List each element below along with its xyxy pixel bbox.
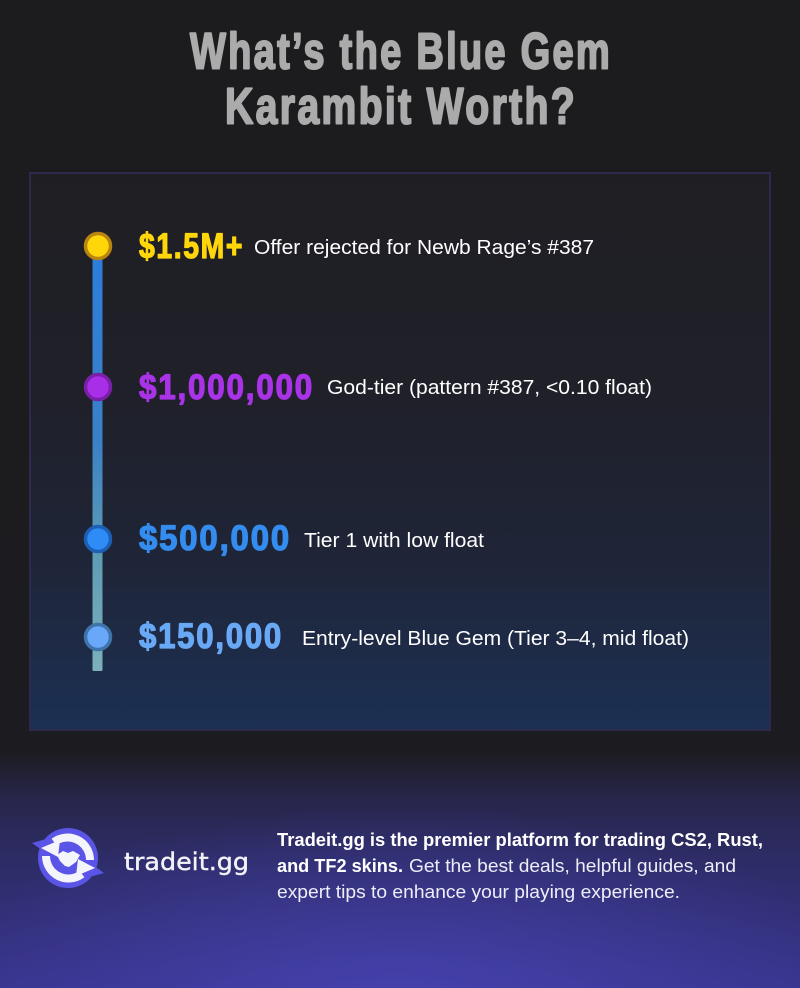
tier: 1,000,000 [86,367,652,407]
tier: 500,000 [86,518,484,558]
marker: purple [86,374,110,400]
price: 150,000: $150,000 [139,616,283,656]
description: 1.5M: Offer rejected for Newb Rage’s #387 [254,237,594,259]
title: Karambit Worth? [225,78,577,134]
price: 500,000: $500,000 [139,518,291,558]
footer description: and TF2 skins. [277,856,403,876]
description: 1,000,000: God-tier (pattern #387, <0.10 float) [327,377,652,399]
title: What’s the Blue Gem [190,22,612,80]
title [190,22,612,134]
footer description: Tradeit.gg is the premier platform for trading CS2, Rust, [277,830,763,850]
marker: blue [86,526,110,552]
price: 1.5M: $1.5M+ [139,226,244,266]
footer description: expert tips to enhance your playing experience. [277,882,680,902]
panel: price timeline [30,173,770,730]
description: 150,000: Entry-level Blue Gem (Tier 3–4, mid float) [302,628,689,650]
timeline line [92,250,102,671]
tier: 150,000 [86,616,689,656]
marker: light blue [86,624,110,650]
price: 1,000,000: $1,000,000 [139,367,314,407]
footer logo icon [32,828,104,888]
footer description: Get the best deals, helpful guides, and [409,856,736,876]
footer logo wordmark: tradeit.gg [124,848,249,876]
tier: 1.5M [86,226,594,266]
marker: yellow [86,234,110,258]
description: 500,000: Tier 1 with low float [304,530,484,552]
footer description [277,830,763,902]
